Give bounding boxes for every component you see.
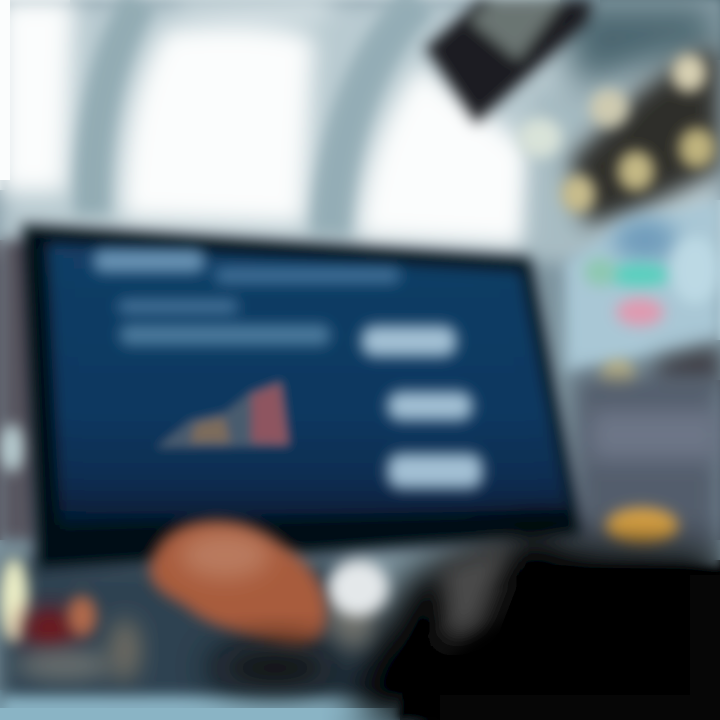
- hand: orange-brown blurred hand on keyboard: [150, 522, 340, 692]
- monitor: dark frame with blue screen: [22, 224, 582, 570]
- lower right: blurred trading floor: [575, 375, 720, 550]
- frame edge: light desk strip at bottom: [0, 708, 400, 720]
- shirt cuff: white band: [328, 560, 388, 650]
- chart: small rising bars: [155, 380, 290, 448]
- desk: foreground surface: [0, 558, 430, 720]
- frame edge: right-hand black margin: [690, 575, 720, 720]
- hanging screen: dark diamond panel: [425, 0, 592, 124]
- windows: bright arched panes: [0, 0, 534, 246]
- suit core: solid black lower body: [395, 565, 720, 720]
- sleeve highlight: [440, 540, 515, 640]
- left edge: blurred floor behind monitor: [0, 240, 35, 540]
- screen content: figures column: [362, 326, 482, 488]
- arches: window columns: [92, 0, 420, 235]
- screen content: heading and copy lines: [94, 250, 400, 345]
- frame edge: black suit to the corner: [430, 590, 720, 720]
- right area: wall and ceiling lights: [518, 0, 720, 260]
- frame edge: window at left: [0, 0, 10, 180]
- frame edge: bottom black margin: [440, 695, 720, 720]
- suit: dark sleeve and body: [345, 525, 720, 720]
- wall screen: colourful market board: [565, 200, 720, 396]
